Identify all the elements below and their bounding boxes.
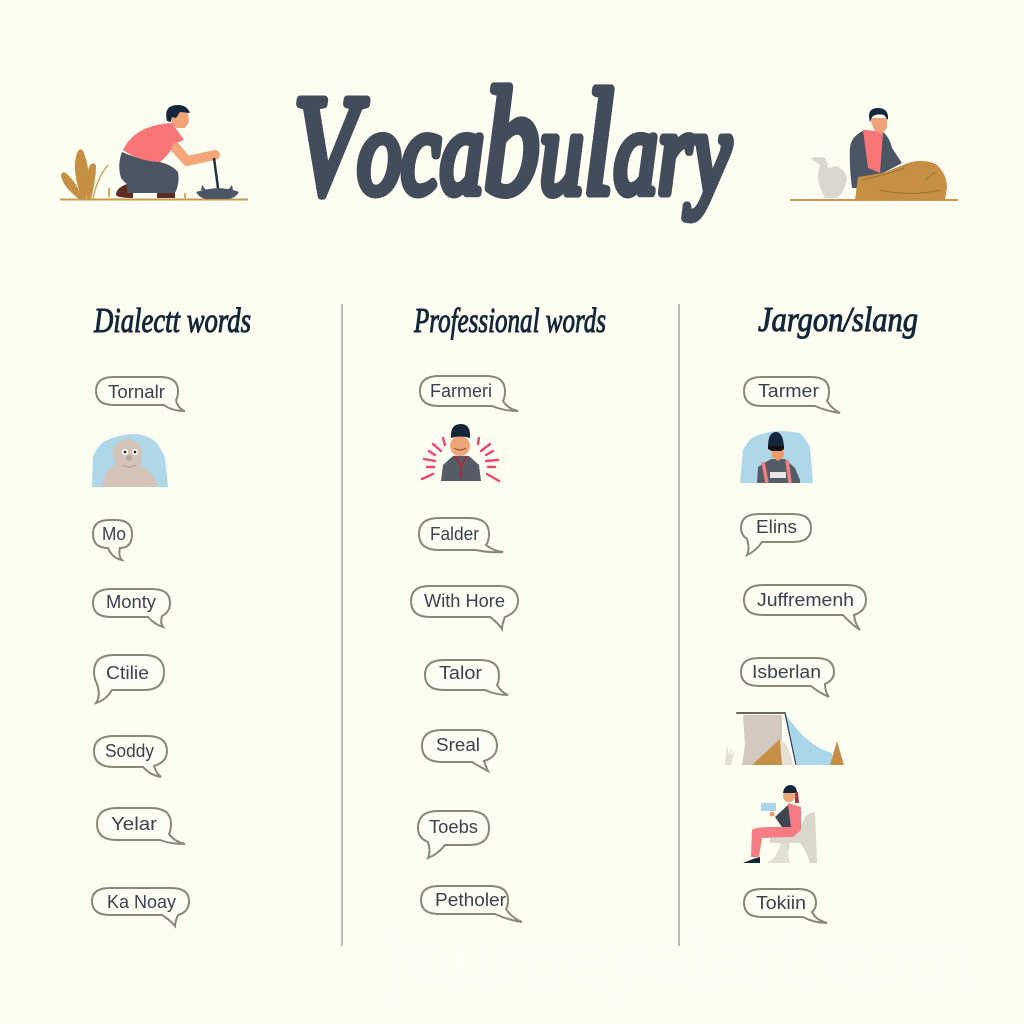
bubble: Ka Noay: Ka Noay <box>107 892 176 912</box>
bubble: Ctilie <box>94 655 164 703</box>
illustration: kneeling farmer with plant and pot <box>60 105 248 200</box>
bubble: Mo: Mo <box>102 524 126 544</box>
watermark: journeyaiart.com <box>388 917 972 1002</box>
title: Vocabulary <box>294 57 731 226</box>
heading: dialect words: Dialectt words <box>93 301 251 340</box>
bubble: With Hore: With Hore <box>424 591 505 611</box>
bubble: Tokiin: Tokiin <box>756 893 806 913</box>
bubble: Juffremenh: Juffremenh <box>757 590 854 610</box>
bubble: Monty: Monty <box>106 592 156 612</box>
bubble: Tornalr <box>96 377 185 411</box>
bubble: Yelar <box>97 808 185 844</box>
bubble: Toebs: Toebs <box>429 817 478 837</box>
bubble: Sreal: Sreal <box>436 735 480 755</box>
bubble: Tarmer <box>744 377 840 413</box>
bubble: Soddy <box>94 736 167 777</box>
panel: jargon and slang <box>725 300 918 923</box>
bubble: Elins: Elins <box>756 517 797 537</box>
bubble: Petholer: Petholer <box>435 890 506 910</box>
bubble: Farmeri: Farmeri <box>430 381 492 401</box>
illustration: farmer with sack and sheep <box>790 108 958 200</box>
bubble: Juffremenh <box>744 585 866 630</box>
bubble: Toebs <box>418 811 489 858</box>
panel: professional words <box>411 301 606 922</box>
bubble: Tokiin <box>744 889 827 923</box>
bubble: Elins <box>741 514 811 555</box>
bubble: Farmeri <box>420 376 518 411</box>
heading: professional words: Professional words <box>413 301 606 340</box>
bubble: Talor <box>425 660 508 695</box>
icon: man with sunglasses <box>740 431 813 483</box>
bubble: Isberlan: Isberlan <box>752 662 821 682</box>
bubble: Ctilie: Ctilie <box>106 663 149 683</box>
icon: excited man with rays <box>422 424 499 481</box>
icon: seal creature <box>92 434 168 487</box>
bubble: Petholer <box>421 886 522 922</box>
panel: dialect words <box>92 301 251 926</box>
bubble: With Hore <box>411 586 518 629</box>
bubble: Sreal <box>422 730 497 771</box>
bubble: Yelar: Yelar <box>111 814 157 834</box>
bubble: Falder: Falder <box>430 524 479 544</box>
bubble: Soddy: Soddy <box>105 741 154 761</box>
heading: jargon/slang: Jargon/slang <box>758 300 918 339</box>
bubble: Tarmer: Tarmer <box>758 381 819 401</box>
icon: tent and canvas <box>725 713 844 765</box>
bubble: Isberlan <box>741 658 834 697</box>
bubble: Talor: Talor <box>439 663 482 683</box>
bubble: Monty <box>93 589 170 627</box>
bubble: Mo <box>93 520 132 560</box>
bubble: Falder <box>419 518 503 552</box>
bubble: Tornalr: Tornalr <box>108 382 165 402</box>
icon: seated woman reading <box>743 785 817 863</box>
bubble: Ka Noay <box>92 888 189 926</box>
